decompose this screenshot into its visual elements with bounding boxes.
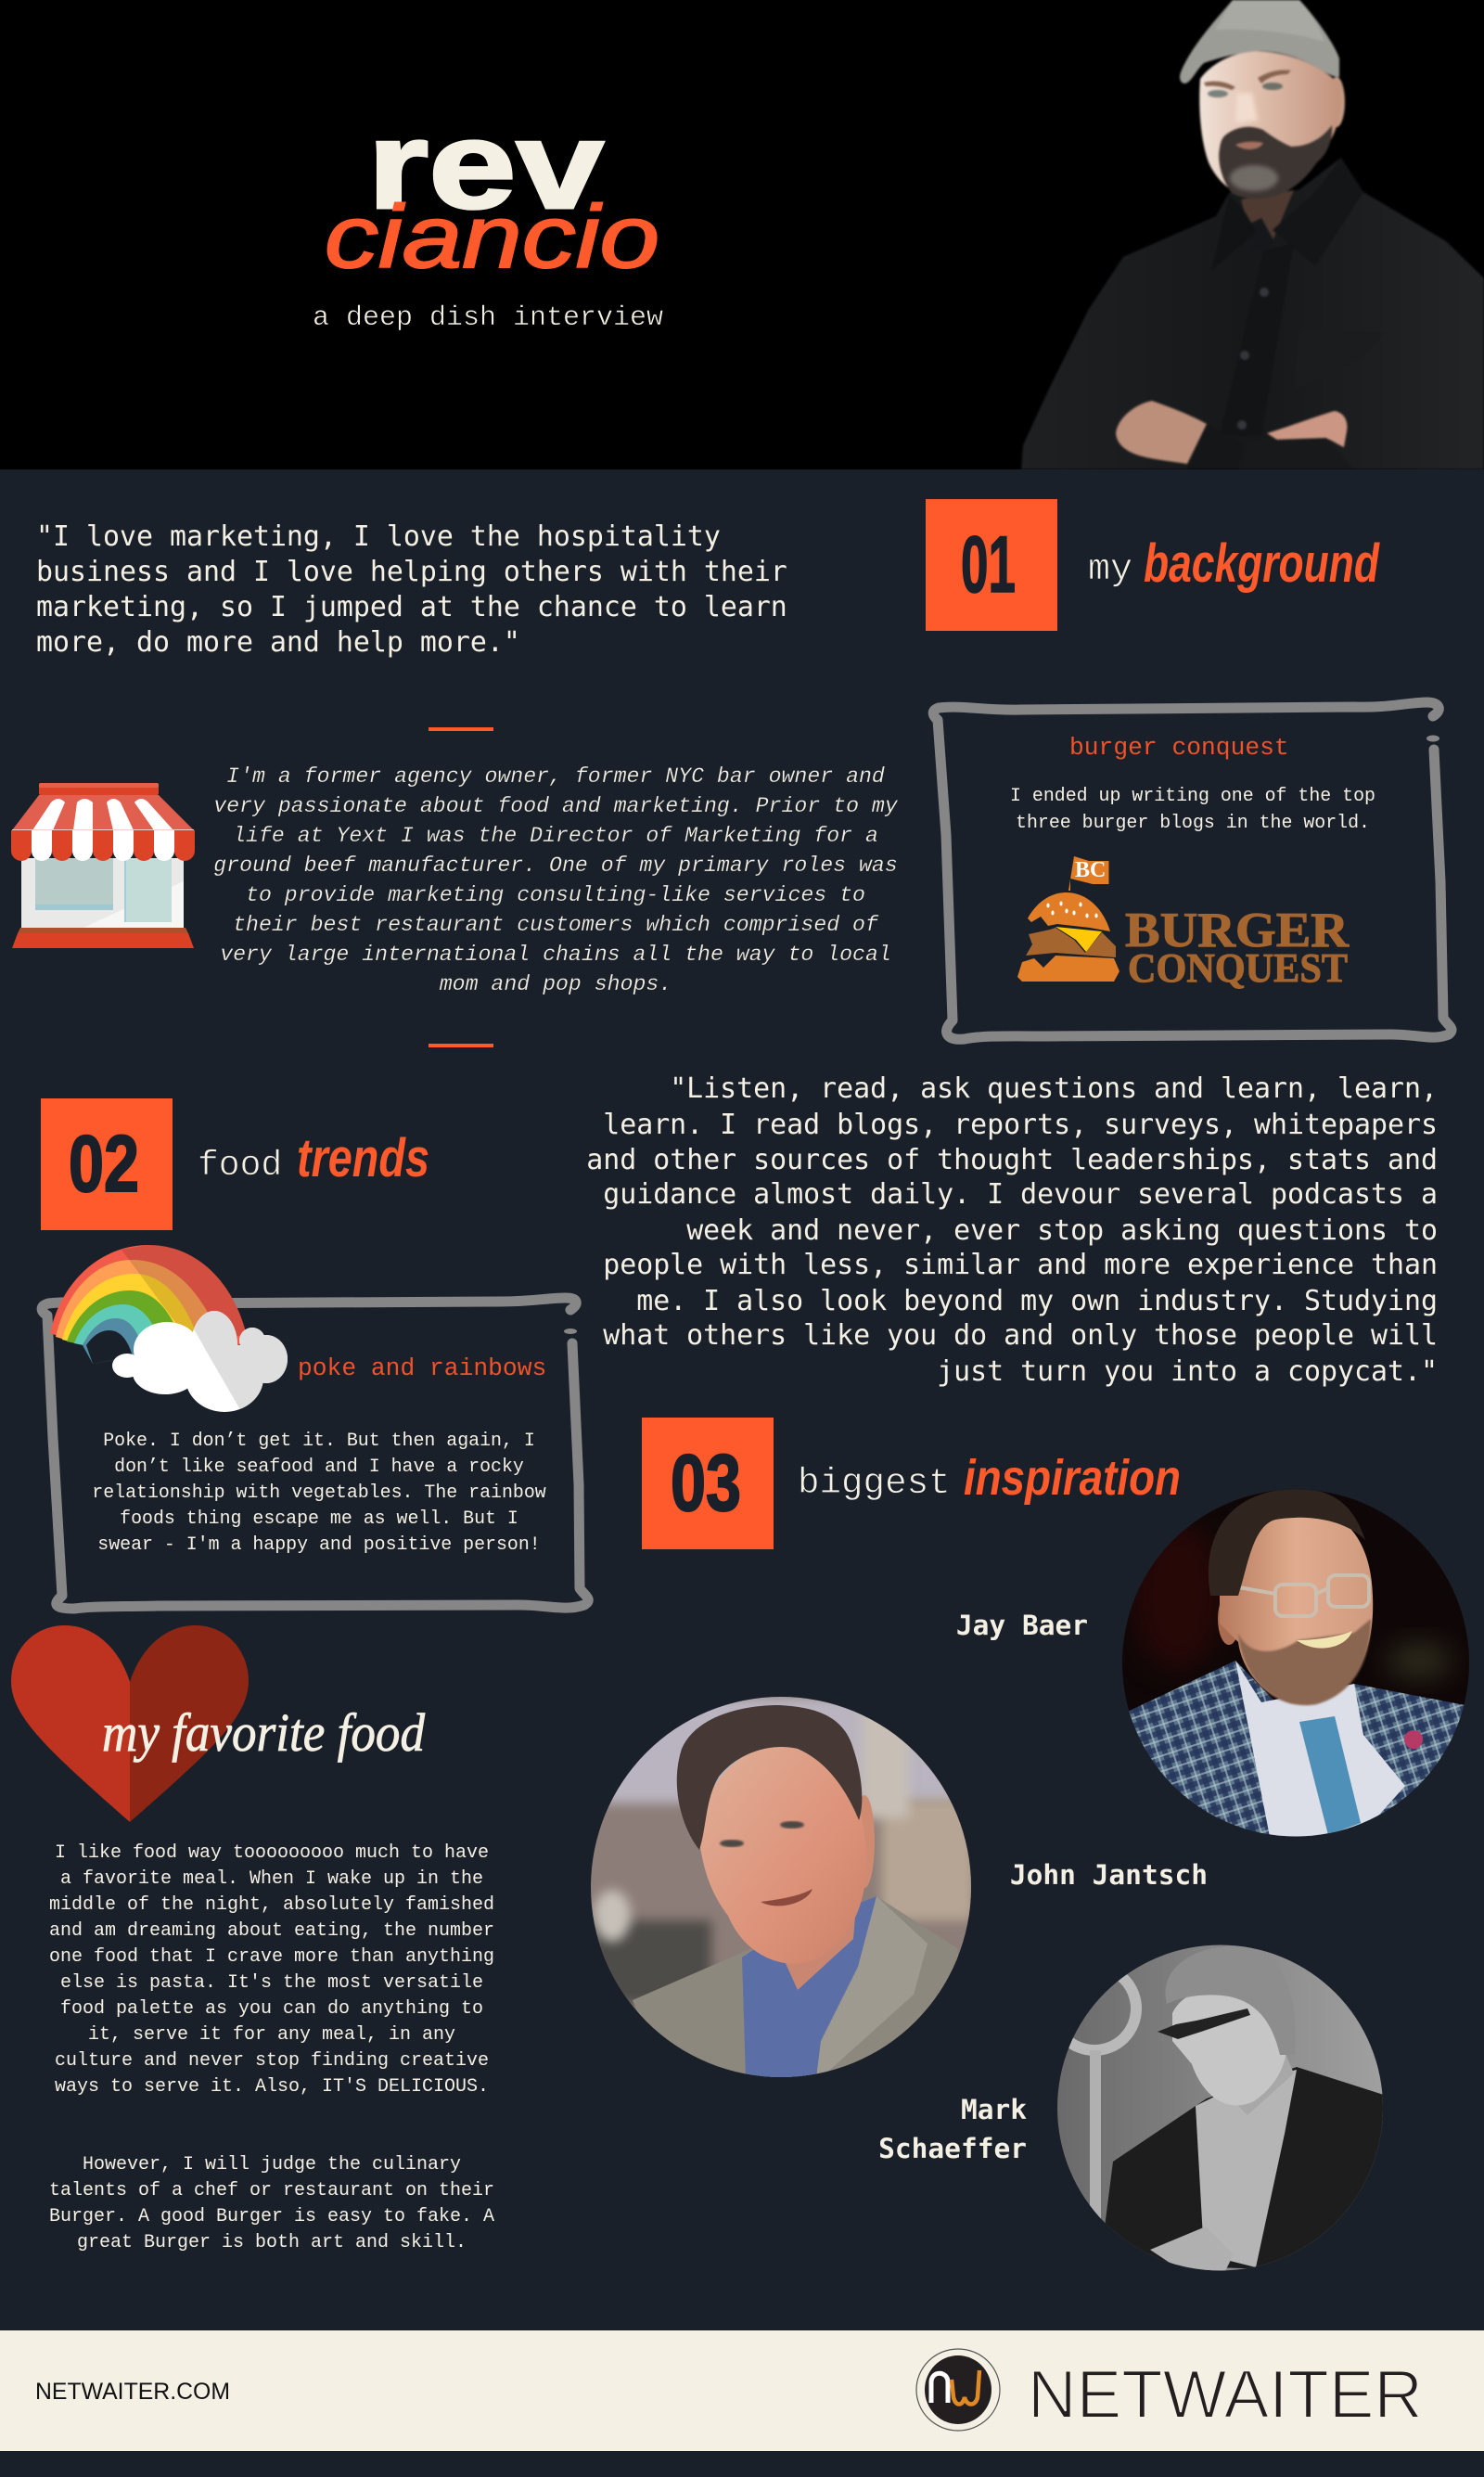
panel text: I ended up writing one of the top — [1010, 785, 1375, 806]
photo: John Jantsch — [591, 1697, 983, 2087]
netwaiter wordmark: NETWAITER — [1028, 2357, 1423, 2432]
cheese — [1055, 927, 1102, 952]
icon: heart — [11, 1625, 249, 1822]
flag — [1068, 856, 1109, 891]
section 02 badge — [41, 1098, 173, 1230]
nose — [1235, 93, 1258, 123]
shop base — [18, 928, 188, 933]
quote: listen read ask: and other sources of thought leaderships, stats and — [586, 1144, 1438, 1176]
label: Mark Schaeffer — [878, 2094, 1027, 2164]
icon: storefront — [11, 783, 195, 948]
text: favorite food paragraph two: talents of a chef or restaurant on their — [49, 2180, 494, 2201]
text: background paragraph — [213, 764, 899, 996]
text: favorite food paragraph one: a favorite meal. When I wake up in the — [60, 1868, 483, 1890]
burger conquest logo — [1017, 856, 1350, 991]
quote: listen read ask: guidance almost daily. I devour several podcasts a — [603, 1178, 1438, 1211]
footer band — [0, 2330, 1484, 2451]
text: favorite food paragraph one: food palette as you can do anything to — [60, 1998, 483, 2020]
jacket — [1100, 2067, 1387, 2273]
awning valance — [12, 829, 194, 831]
panel text — [92, 1430, 546, 1555]
collar — [1243, 211, 1252, 226]
jacket — [1129, 1661, 1464, 1837]
beard — [1219, 125, 1332, 199]
bun bottom — [1017, 956, 1119, 982]
section 01 badge: 01 — [961, 520, 1016, 610]
text: background paragraph: I'm a former agency owner, former NYC bar owner and — [226, 764, 885, 789]
shirt — [1196, 2070, 1297, 2267]
quote: listen read ask: "Listen, read, ask questions and learn, learn, — [670, 1072, 1438, 1105]
quote: I love marketing — [36, 520, 787, 659]
shirt body — [1021, 158, 1484, 469]
left forearm — [1116, 401, 1207, 464]
panel text — [1010, 785, 1375, 833]
section 03 heading — [798, 1450, 1181, 1506]
burger conquest logo: BC — [1075, 858, 1106, 882]
photo: Jay Baer — [1118, 1489, 1475, 1846]
label: John Jantsch: John Jantsch — [1010, 1859, 1208, 1891]
eyes — [1208, 90, 1228, 97]
mouth — [1235, 142, 1263, 149]
placket — [1220, 243, 1294, 436]
hand-drawn frame — [42, 1298, 588, 1609]
text: favorite food paragraph one: it, serve it for any meal, in any — [88, 2024, 455, 2046]
netwaiter logo icon — [916, 2349, 1000, 2431]
panel text: relationship with vegetables. The rainbow — [92, 1482, 546, 1503]
hat — [1180, 0, 1339, 83]
hand — [1150, 2228, 1230, 2271]
quote: listen read ask — [586, 1072, 1438, 1388]
ear — [1328, 77, 1345, 127]
text: background paragraph: life at Yext I was the Director of Marketing for a — [233, 824, 878, 848]
footer url: NETWAITER.COM — [35, 2379, 230, 2405]
text: favorite food paragraph one: middle of the night, absolutely famished — [49, 1894, 494, 1916]
text: background paragraph: very large international chains all the way to local — [220, 943, 891, 967]
smile — [1297, 1631, 1352, 1649]
section 01 badge — [926, 499, 1057, 631]
patty — [1026, 928, 1116, 957]
title: ciancio: ciancio — [325, 187, 659, 287]
heading: my favorite food: my favorite food — [102, 1702, 426, 1763]
quote: I love marketing: marketing, so I jumped at the chance to learn — [36, 591, 787, 623]
panel text: swear - I'm a happy and positive person! — [97, 1534, 541, 1555]
ear — [1218, 1605, 1235, 1645]
beard — [1238, 1619, 1371, 1705]
text: favorite food paragraph one: else is pasta. It's the most versatile — [60, 1972, 483, 1994]
frame dot — [564, 1328, 577, 1334]
logo wordmark: BURGER — [1125, 904, 1350, 957]
icon: cloud — [112, 1311, 288, 1412]
section 02 heading: trends — [297, 1128, 429, 1188]
shirt — [1235, 1661, 1405, 1842]
quote: listen read ask: just turn you into a copycat." — [937, 1355, 1438, 1388]
panel text: foods thing escape me as well. But I — [120, 1508, 518, 1529]
head — [1172, 1987, 1287, 2105]
panel title: poke and rainbows — [298, 1354, 546, 1382]
panel text: three burger blogs in the world. — [1016, 812, 1370, 833]
pocket — [1294, 329, 1386, 390]
text: favorite food paragraph one: culture and never stop finding creative — [55, 2050, 489, 2072]
head — [1199, 51, 1341, 199]
quote: listen read ask: people with less, similar and more experience than — [603, 1249, 1438, 1281]
panel title: burger conquest — [1069, 734, 1289, 762]
skin at neck — [1241, 189, 1295, 239]
glasses — [1234, 1575, 1369, 1616]
text: background paragraph: mom and pop shops. — [440, 972, 672, 996]
text: background paragraph: to provide marketing consulting-like services to — [246, 883, 865, 907]
section 03 badge — [642, 1418, 774, 1549]
eyes and mouth — [720, 1840, 744, 1847]
panel: poke and rainbows — [42, 1245, 588, 1609]
text: favorite food paragraph one: ways to serve it. Also, IT'S DELICIOUS. — [55, 2076, 489, 2098]
photo: Mark Schaeffer — [1053, 1944, 1387, 2273]
quote: I love marketing: business and I love helping others with their — [36, 556, 787, 588]
header band — [0, 0, 1484, 469]
text: favorite food paragraph one: and am dreaming about eating, the number — [49, 1920, 494, 1942]
title: rev: rev — [367, 96, 604, 235]
text: favorite food paragraph two: great Burger is both art and skill. — [77, 2232, 467, 2253]
text: favorite food paragraph two — [49, 2154, 494, 2253]
hand-drawn frame — [933, 702, 1452, 1039]
label: Jay Baer: Jay Baer — [956, 1610, 1088, 1641]
quote: I love marketing: more, do more and help more." — [36, 626, 520, 659]
section 02 heading: food — [198, 1146, 282, 1186]
burger conquest logo: CONQUEST — [1128, 945, 1348, 991]
quote: listen read ask: me. I also look beyond my own industry. Studying — [636, 1285, 1438, 1317]
frame dot — [1426, 735, 1439, 742]
label: Mark Schaeffer: Mark — [961, 2094, 1027, 2125]
bun top — [1028, 892, 1110, 931]
glasses — [1158, 2009, 1250, 2039]
quote: listen read ask: what others like you do and only those people will — [603, 1319, 1438, 1352]
panel: burger conquest — [933, 702, 1452, 1039]
hair — [677, 1705, 862, 1850]
section 02 badge: 02 — [69, 1120, 139, 1209]
quote: I love marketing: "I love marketing, I love the hospitality — [36, 520, 721, 553]
right hand — [1267, 411, 1347, 447]
text: background paragraph: very passionate about food and marketing. Prior to my — [213, 794, 899, 818]
section 01 heading — [1088, 533, 1380, 594]
ear — [861, 1795, 875, 1888]
section 02 heading — [198, 1128, 429, 1188]
quote: listen read ask: week and never, ever stop asking questions to — [686, 1214, 1438, 1247]
quote: listen read ask: learn. I read blogs, reports, surveys, whitepapers — [603, 1109, 1438, 1141]
awning slope — [12, 795, 194, 830]
right window — [124, 858, 172, 922]
walls — [21, 858, 184, 929]
section 03 heading: biggest — [798, 1462, 951, 1504]
section 01 heading: my — [1088, 549, 1132, 591]
panel text: don’t like seafood and I have a rocky — [114, 1456, 524, 1477]
section 03 heading: inspiration — [964, 1450, 1181, 1506]
shirt — [742, 1896, 876, 2078]
awning top bar — [39, 783, 159, 795]
jacket — [633, 1897, 959, 2077]
tie — [1299, 1716, 1361, 1835]
icon: rainbow — [50, 1245, 247, 1364]
section 01 heading: background — [1144, 533, 1380, 594]
label: Mark Schaeffer: Schaeffer — [878, 2133, 1027, 2164]
text: favorite food paragraph two: Burger. A good Burger is easy to fake. A — [49, 2206, 494, 2227]
hair — [1166, 1946, 1296, 2055]
head — [699, 1744, 866, 1964]
subtitle: a deep dish interview — [313, 302, 663, 334]
photo: Rev Ciancio portrait — [1021, 0, 1484, 469]
text: background paragraph: ground beef manufacturer. One of my primary roles was — [213, 853, 898, 878]
pocket flower — [1404, 1730, 1423, 1749]
neck — [785, 1918, 855, 1990]
text: favorite food paragraph one: I like food way tooooooooo much to have — [55, 1842, 489, 1864]
neck — [1224, 2041, 1294, 2115]
text: favorite food paragraph one: one food that I crave more than anything — [49, 1946, 494, 1968]
head — [1220, 1508, 1373, 1704]
panel text: Poke. I don’t get it. But then again, I — [103, 1430, 535, 1451]
section 03 badge: 03 — [671, 1439, 741, 1528]
left window — [35, 858, 113, 910]
text: background paragraph: their best restaurant customers which comprised of — [233, 913, 879, 937]
text: favorite food paragraph one — [49, 1842, 494, 2098]
hair — [1209, 1489, 1365, 1596]
text: favorite food paragraph two: However, I will judge the culinary — [83, 2154, 461, 2175]
